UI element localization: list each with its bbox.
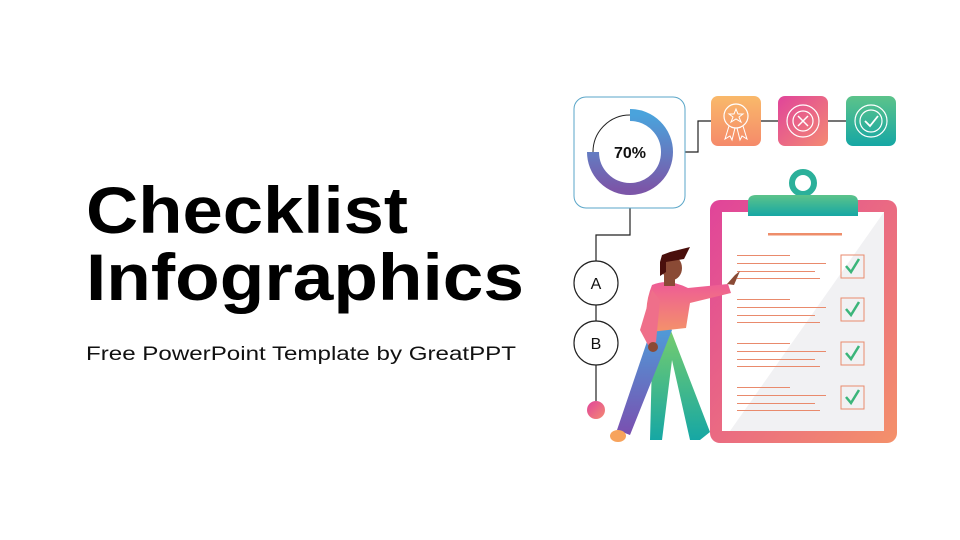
clipboard [710,172,897,443]
step A: A [591,276,602,293]
donut panel: 70% [574,97,685,208]
end dot [587,401,605,419]
icon: reject badge [778,96,828,146]
title: Infographics [86,240,524,314]
icon: award badge [711,96,761,146]
person pointing [610,247,740,442]
step B: B [591,336,601,353]
icon: approved badge [846,96,896,146]
step A [574,261,618,305]
checkboxes [841,255,864,409]
donut panel: 70%: 70% [614,145,646,162]
connector lines [596,121,846,401]
title [86,173,524,314]
title: Checklist [86,173,408,247]
subtitle: Free PowerPoint Template by GreatPPT [86,344,516,365]
step B [574,321,618,365]
